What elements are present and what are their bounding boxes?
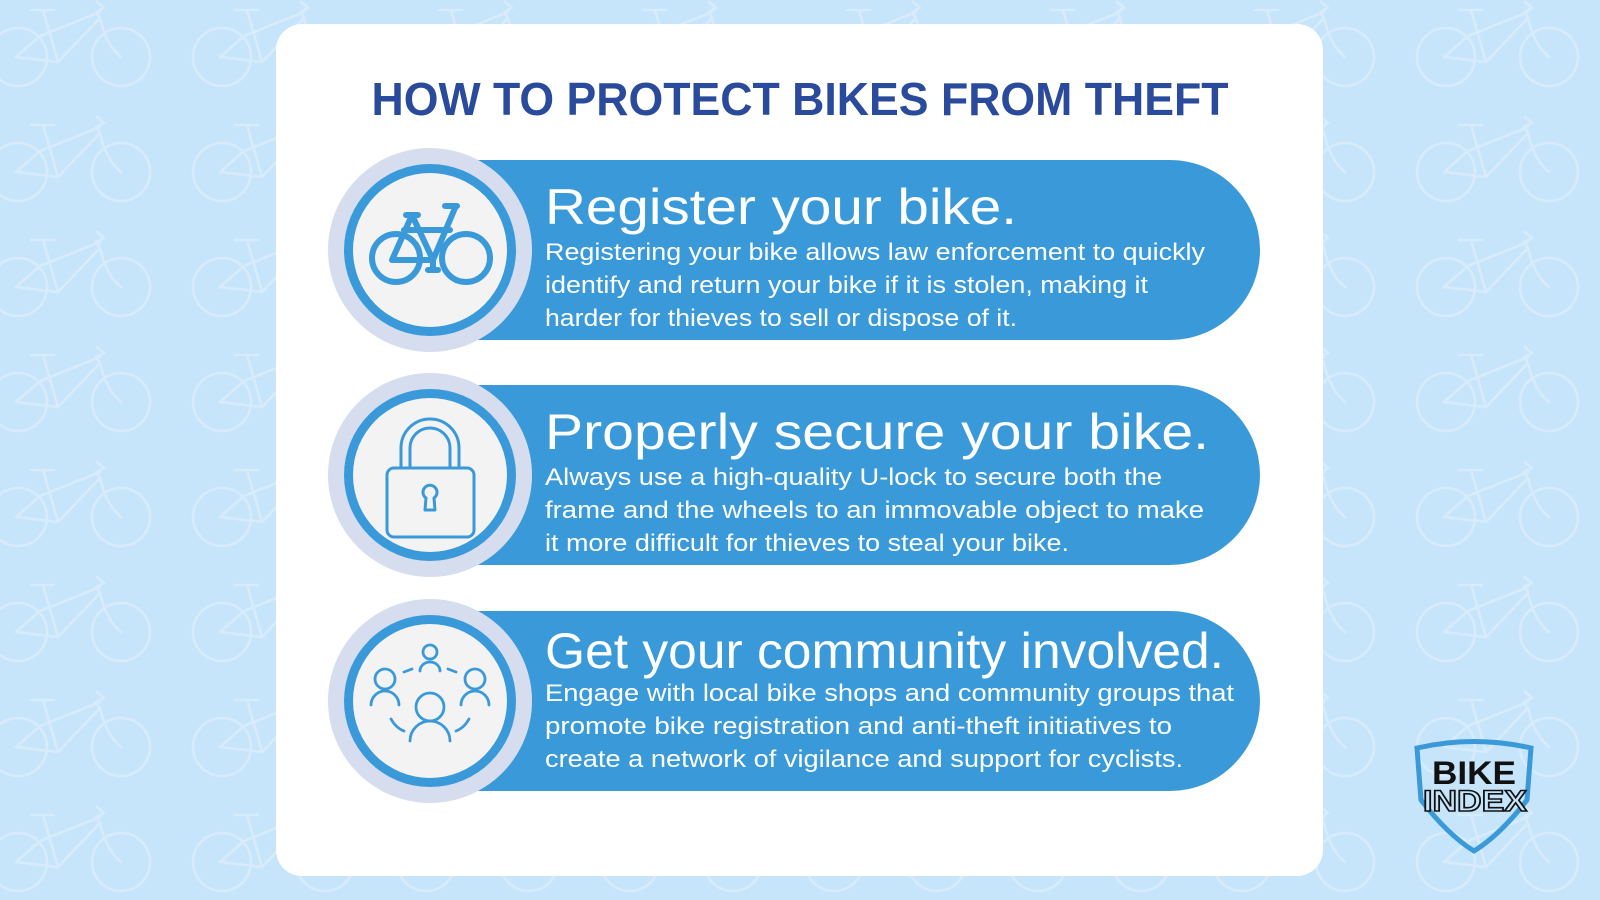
text block: harder for thieves to sell or dispose of it. <box>545 305 1017 332</box>
text block: create a network of vigilance and support for cyclists. <box>545 746 1183 773</box>
text block: it more difficult for thieves to steal your bike. <box>545 530 1069 557</box>
card <box>276 24 1323 876</box>
logo: bike index: BIKE <box>1432 755 1516 791</box>
logo: bike index: INDEX <box>1423 785 1527 818</box>
panel: register <box>328 148 1260 352</box>
text block: identify and return your bike if it is stolen, making it <box>545 272 1148 299</box>
icon: bicycle <box>372 206 490 282</box>
text block: Always use a high-quality U-lock to secure both the <box>545 464 1162 491</box>
heading: Properly secure your bike. <box>545 404 1209 460</box>
heading: Get your community involved. <box>545 623 1224 679</box>
logo: bike index <box>1417 742 1531 851</box>
text block <box>545 680 1234 773</box>
panel: secure <box>328 373 1260 577</box>
text block <box>545 464 1204 557</box>
text block: promote bike registration and anti-theft initiatives to <box>545 713 1172 740</box>
heading: Register your bike. <box>545 179 1017 235</box>
panel: community <box>328 599 1260 803</box>
text block <box>545 239 1205 332</box>
icon: community <box>371 645 489 741</box>
text block: Registering your bike allows law enforcement to quickly <box>545 239 1205 266</box>
text block: frame and the wheels to an immovable object to make <box>545 497 1204 524</box>
title: HOW TO PROTECT BIKES FROM THEFT <box>372 73 1228 125</box>
icon: padlock <box>387 419 474 537</box>
text block: Engage with local bike shops and community groups that <box>545 680 1234 707</box>
